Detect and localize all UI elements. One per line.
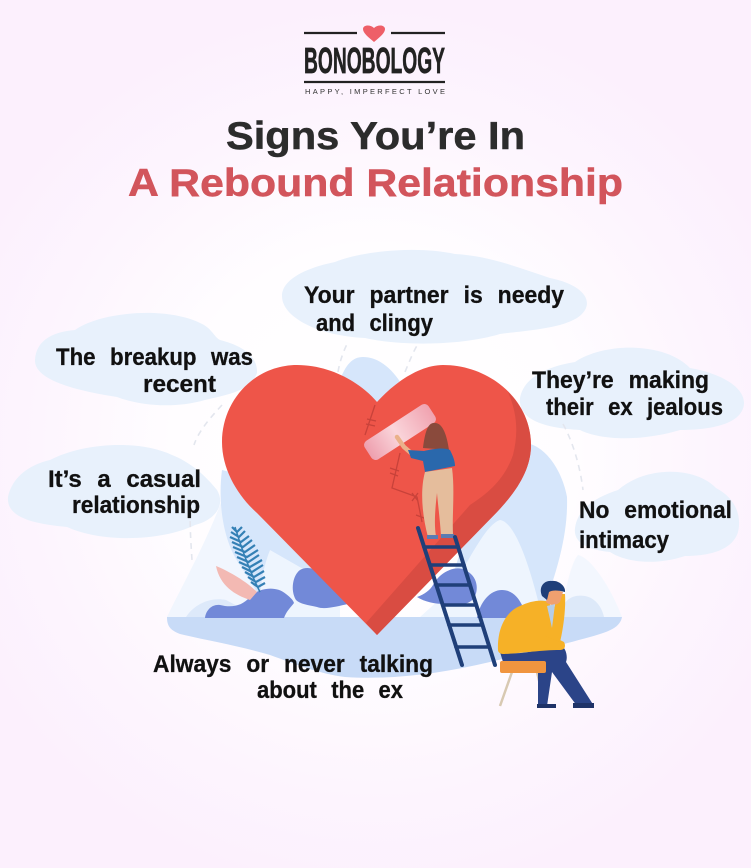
line 1: Your partner is needy: [304, 282, 565, 309]
line 1: It’s a casual: [48, 466, 201, 493]
shoes: [537, 703, 594, 708]
label: no emotional: [579, 497, 732, 554]
arm up: [545, 594, 565, 642]
arm: [397, 437, 411, 453]
bushes: [205, 568, 522, 618]
line 2: about the ex: [257, 677, 404, 704]
torso: [498, 601, 565, 654]
title line 2: A Rebound Relationship: [128, 162, 623, 205]
hair: [541, 581, 565, 600]
logo heart: [363, 25, 385, 42]
blue hill left: [221, 470, 340, 617]
line 2: recent: [143, 371, 216, 398]
label: the breakup: [56, 344, 253, 398]
ground ellipse: [167, 617, 622, 678]
line 2: relationship: [72, 492, 200, 519]
stitches: [365, 405, 424, 522]
logo tagline: HAPPY, IMPERFECT LOVE: [305, 87, 445, 96]
shoes: [427, 534, 454, 539]
dashed connectors: [190, 342, 583, 560]
label: your partner: [304, 282, 565, 337]
ladder: [418, 528, 495, 665]
right hill: [440, 443, 567, 617]
top hill: [338, 357, 402, 410]
plant: blue fern: [230, 527, 265, 592]
sad man on stool: [498, 581, 594, 708]
plant: pink leaf: [216, 566, 257, 600]
bush right small: [477, 590, 522, 618]
line 2: their ex jealous: [546, 394, 723, 421]
bush left: [205, 589, 294, 618]
bush right behind ladder: [417, 568, 477, 605]
background scenery: [167, 357, 622, 617]
stool legs: [500, 672, 545, 706]
logo: [304, 25, 445, 96]
small left hill: [186, 599, 258, 617]
trousers: [422, 468, 453, 537]
cloud: no emotional intimacy: [575, 472, 739, 562]
right light hill inner: [420, 520, 542, 617]
label: casual: [48, 466, 201, 519]
logo rules: [304, 33, 445, 82]
heart shade: [366, 392, 531, 635]
top: [408, 448, 455, 472]
line 2: and clingy: [316, 310, 434, 337]
outer pale hill left: [167, 500, 300, 617]
collar: [547, 604, 555, 628]
line 1: No emotional: [579, 497, 732, 524]
face: [546, 587, 563, 605]
line 1: Always or never talking: [153, 651, 433, 678]
logo wordmark: BONOBOLOGY: [304, 40, 445, 81]
cloud: breakup was recent: [35, 313, 257, 405]
far right hill: [560, 555, 622, 617]
title: [128, 115, 623, 205]
line 2: intimacy: [579, 527, 670, 554]
ladder rails: [418, 528, 495, 665]
legs: [500, 644, 594, 706]
stool seat: [500, 661, 546, 673]
cloud: needy and clingy: [282, 250, 587, 344]
small right pale bush: [560, 596, 604, 617]
title line 1: Signs You’re In: [226, 115, 525, 158]
hair: [423, 423, 449, 450]
line 1: They’re making: [532, 367, 709, 394]
cloud: making their ex jealous: [520, 348, 744, 438]
light hill left inner: [260, 550, 340, 617]
heart body: [222, 365, 531, 635]
label: they're making: [532, 367, 723, 421]
bandage: [362, 402, 438, 462]
label: always or never: [153, 651, 433, 704]
bush center: [293, 568, 348, 608]
ladder rungs: [424, 547, 489, 647]
line 1: The breakup was: [56, 344, 253, 371]
cloud: casual relationship: [8, 445, 220, 538]
woman on ladder: [397, 423, 455, 539]
heart: [222, 365, 531, 635]
